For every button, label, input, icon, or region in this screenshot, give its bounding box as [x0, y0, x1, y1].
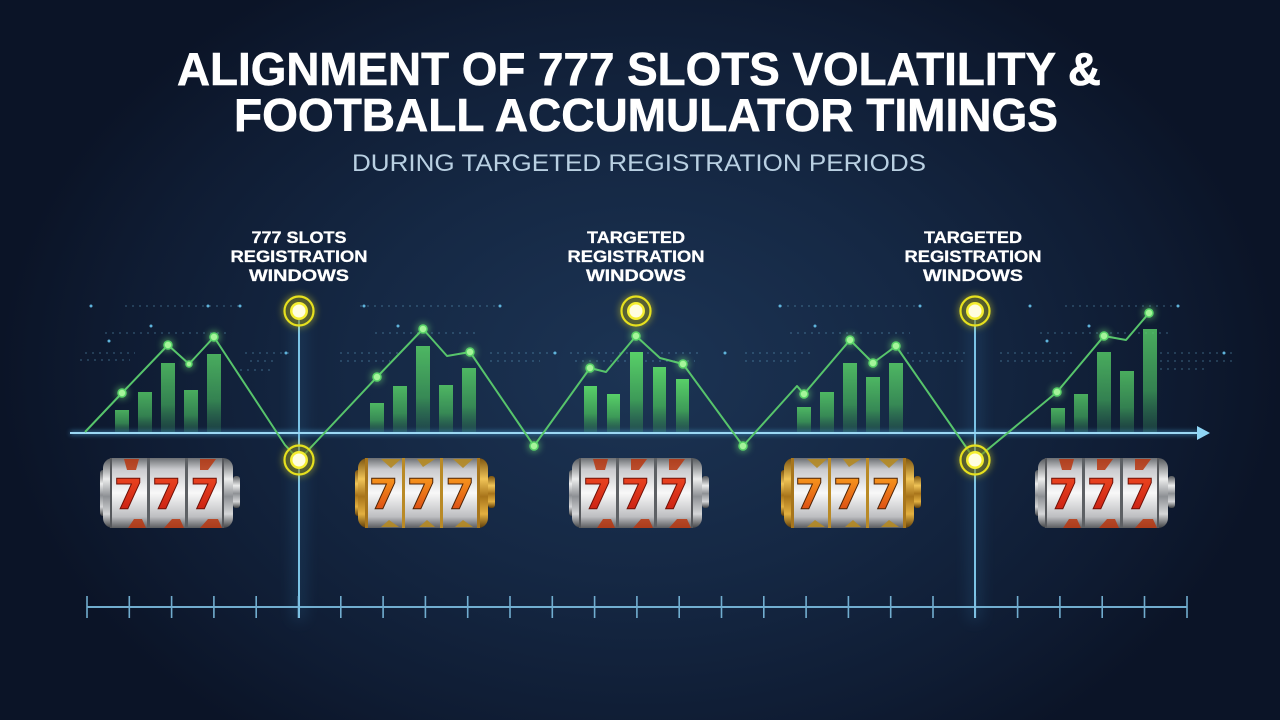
slot reel 5: silver: 7 — [1087, 470, 1116, 519]
label: targeted registration windows centre: WINDOWS — [586, 266, 686, 285]
slot reel 5: silver: 7 — [1125, 470, 1155, 519]
title: FOOTBALL ACCUMULATOR TIMINGS — [234, 89, 1058, 141]
slot reel 4: gold: 7 — [871, 470, 901, 519]
label: targeted registration windows centre: TARGETED — [587, 228, 685, 247]
data dots backdrop — [80, 304, 1235, 370]
guide line: right vertical — [968, 311, 982, 621]
label: 777 slots registration windows: REGISTRATION — [230, 247, 368, 266]
slot reel 4: gold: 7 — [833, 470, 862, 519]
label: targeted registration windows right: REGISTRATION — [904, 247, 1042, 266]
line nodes — [116, 307, 1155, 452]
label: targeted registration windows centre — [568, 228, 704, 285]
slot reel 4: gold: 7 — [795, 470, 824, 519]
label: 777 slots registration windows — [230, 228, 368, 285]
slot reel 1: silver: 7 — [114, 470, 143, 519]
marker: lower right — [960, 446, 990, 474]
timeline ruler — [87, 596, 1187, 618]
bars: group 2 — [370, 346, 476, 432]
volatility line — [85, 307, 1155, 460]
marker: top right — [960, 296, 990, 326]
slot reel 5: silver — [1035, 458, 1175, 528]
slot reel 2: gold — [355, 458, 495, 528]
label: targeted registration windows right: WINDOWS — [923, 266, 1023, 285]
title: ALIGNMENT OF 777 SLOTS VOLATILITY & — [177, 43, 1101, 95]
slot reel 5: silver: 7 — [1049, 470, 1078, 519]
slot reel 3: silver: 7 — [621, 470, 650, 519]
slot reel 1: silver: 7 — [190, 470, 220, 519]
slot reel 1: silver: 7 — [152, 470, 181, 519]
bars: group 4 — [797, 363, 903, 432]
bars: group 1 — [115, 354, 221, 432]
marker: top left — [284, 296, 314, 326]
bar charts — [115, 329, 1157, 432]
time axis with arrow — [70, 426, 1210, 440]
slot reel 2: gold: 7 — [407, 470, 436, 519]
slot reel 3: silver: 7 — [659, 470, 689, 519]
label: targeted registration windows right — [904, 228, 1042, 285]
slot reel 4: gold — [781, 458, 921, 528]
slot reel 1: silver — [100, 458, 240, 528]
slot reel 2: gold: 7 — [445, 470, 475, 519]
label: 777 slots registration windows: 777 SLOTS — [252, 228, 346, 247]
slot reel 3: silver: 7 — [583, 470, 612, 519]
guide line: left vertical — [292, 311, 306, 621]
label: targeted registration windows right: TARGETED — [924, 228, 1022, 247]
yellow markers — [282, 294, 992, 477]
title — [177, 43, 1101, 141]
bars: group 5 — [1051, 329, 1157, 432]
slot reel 2: gold: 7 — [369, 470, 398, 519]
marker: lower left — [284, 446, 314, 474]
label: 777 slots registration windows: WINDOWS — [249, 266, 349, 285]
subtitle: DURING TARGETED REGISTRATION PERIODS — [352, 150, 926, 177]
label: targeted registration windows centre: REGISTRATION — [568, 247, 704, 266]
slot reel 3: silver — [569, 458, 709, 528]
marker: top centre — [622, 296, 650, 326]
bars: group 3 — [584, 352, 689, 432]
